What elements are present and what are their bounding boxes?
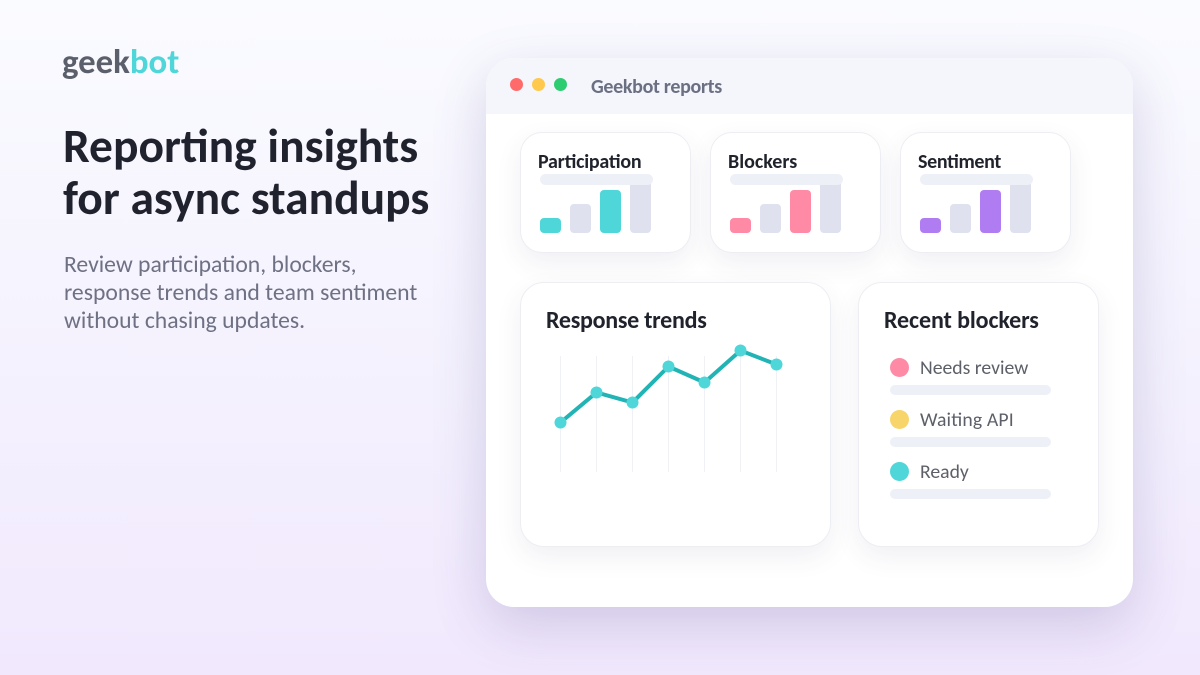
heading: Response trends — [546, 306, 707, 335]
minimise dot — [532, 78, 545, 91]
logo: geekbot — [62, 41, 179, 83]
item: ready: Ready — [920, 460, 969, 484]
panel: recent blockers — [858, 282, 1099, 547]
panel: participation — [520, 132, 691, 253]
title: Reporting insights — [63, 117, 418, 175]
title — [63, 117, 429, 227]
item: waiting api: Waiting API — [920, 408, 1014, 432]
heading: Recent blockers — [884, 306, 1039, 335]
description — [64, 250, 417, 335]
window title: Geekbot reports — [591, 75, 722, 99]
item: ready — [890, 460, 1051, 499]
bar chart — [540, 174, 653, 233]
window header — [486, 58, 1133, 114]
item: needs review — [890, 356, 1051, 395]
panel: response trends — [520, 282, 831, 547]
bar chart — [730, 174, 843, 233]
description: response trends and team sentiment — [64, 278, 417, 307]
panel: sentiment — [900, 132, 1071, 253]
maximise dot — [554, 78, 567, 91]
title: for async standups — [63, 169, 429, 227]
item: waiting api — [890, 408, 1051, 447]
line chart — [554, 344, 782, 472]
label: Sentiment — [918, 150, 1001, 174]
bar chart — [920, 174, 1033, 233]
label: Participation — [538, 150, 641, 174]
item: needs review: Needs review — [920, 356, 1028, 380]
description: Review participation, blockers, — [64, 250, 357, 279]
window panel — [486, 58, 1133, 607]
panel: blockers — [710, 132, 881, 253]
label: Blockers — [728, 150, 797, 174]
close dot — [510, 78, 523, 91]
description: without chasing updates. — [64, 306, 305, 335]
